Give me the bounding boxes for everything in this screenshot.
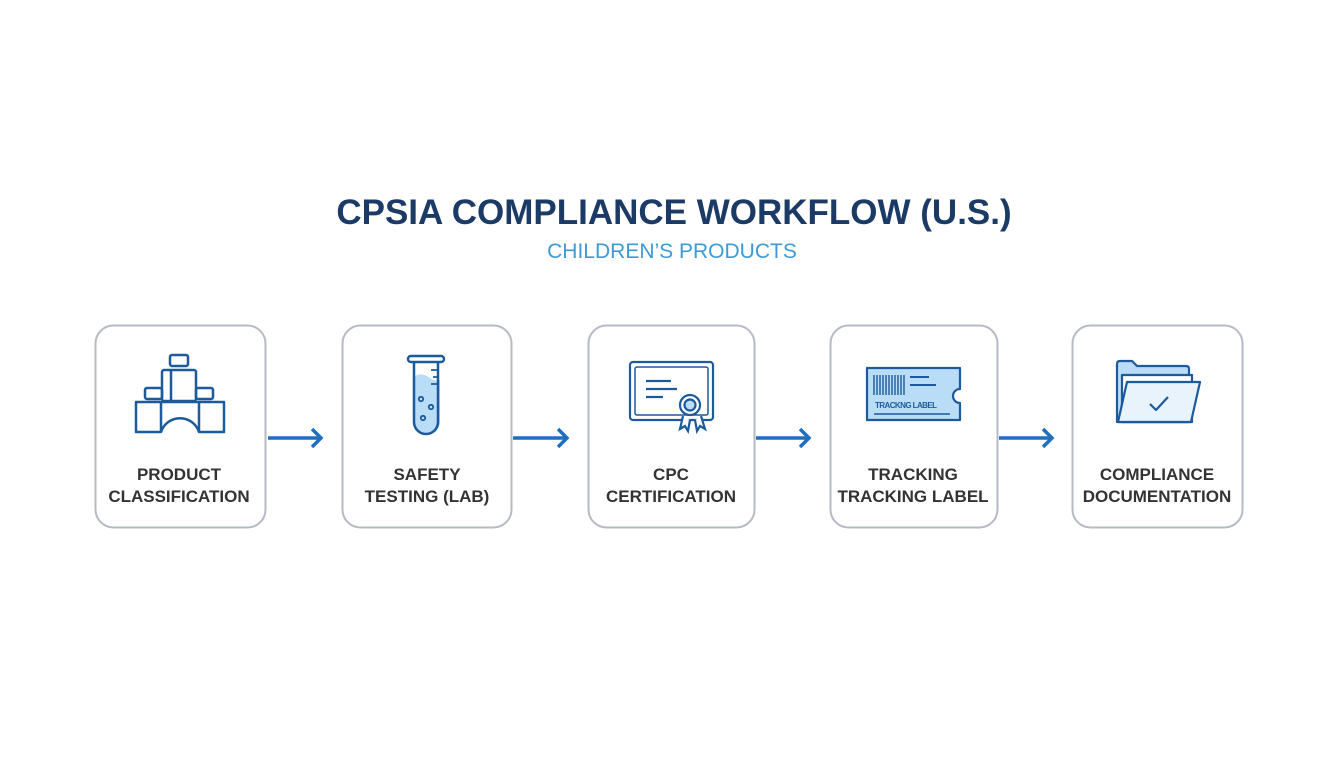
arrow 1 [268,429,321,447]
subtitle: CHILDREN’S PRODUCTS [547,240,797,263]
panel: cpc certification [588,326,754,528]
arrow 3 [756,429,809,447]
label: CPC [653,465,689,484]
label: DOCUMENTATION [1083,487,1231,506]
panel: safety testing [342,326,512,528]
panel: product classification [96,326,266,528]
label: TRACKING [868,465,958,484]
icon: folder with check [1117,361,1200,422]
title: CPSIA COMPLIANCE WORKFLOW (U.S.) [336,193,1012,232]
icon: toy blocks [136,355,224,432]
icon: test tube [408,356,444,434]
label: TRACKING LABEL [837,487,989,506]
label: CLASSIFICATION [108,487,250,506]
icon: tracking label tag: TRACKNG LABEL [875,401,937,410]
icon: certificate [630,362,713,431]
label: TESTING (LAB) [365,487,489,506]
arrow 2 [513,429,567,447]
panel: tracking label [830,326,998,528]
label: SAFETY [393,465,461,484]
label: COMPLIANCE [1100,465,1214,484]
panel: compliance documentation [1072,326,1242,528]
label: CERTIFICATION [606,487,736,506]
icon: tracking label tag [867,368,960,420]
arrow 4 [999,429,1052,447]
label: PRODUCT [137,465,222,484]
